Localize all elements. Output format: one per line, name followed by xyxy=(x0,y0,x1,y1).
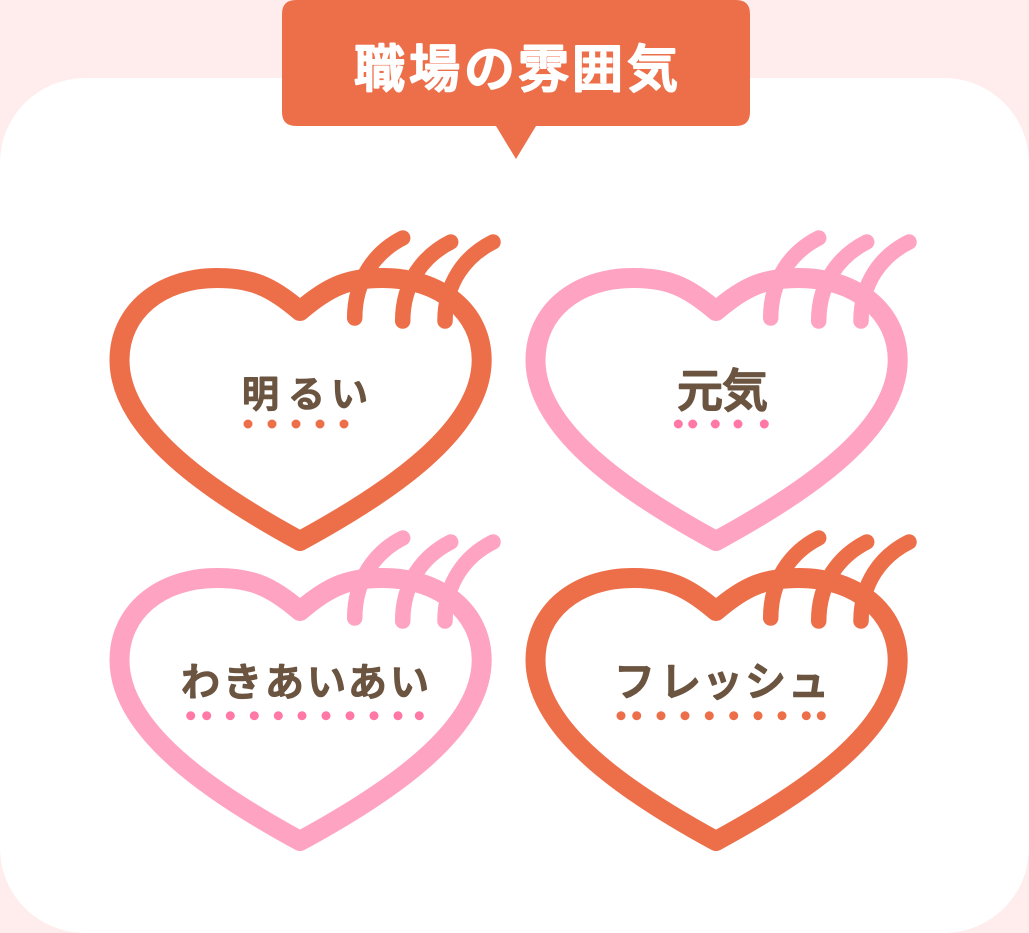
title banner xyxy=(282,0,750,159)
label: わきあいあい xyxy=(181,662,429,705)
label: フレッシュ xyxy=(614,659,829,705)
dotted underline xyxy=(674,420,769,428)
dotted underline xyxy=(616,711,826,720)
heart: フレッシュ xyxy=(536,538,909,841)
dotted underline xyxy=(244,420,348,428)
heart: 明るい xyxy=(120,238,493,541)
title: 職場の雰囲気 xyxy=(354,41,678,98)
heart: わきあいあい xyxy=(120,538,493,841)
label: 明るい xyxy=(242,374,368,415)
label: 元気 xyxy=(677,365,768,417)
dotted underline xyxy=(186,711,424,720)
heart: 元気 xyxy=(536,238,909,541)
